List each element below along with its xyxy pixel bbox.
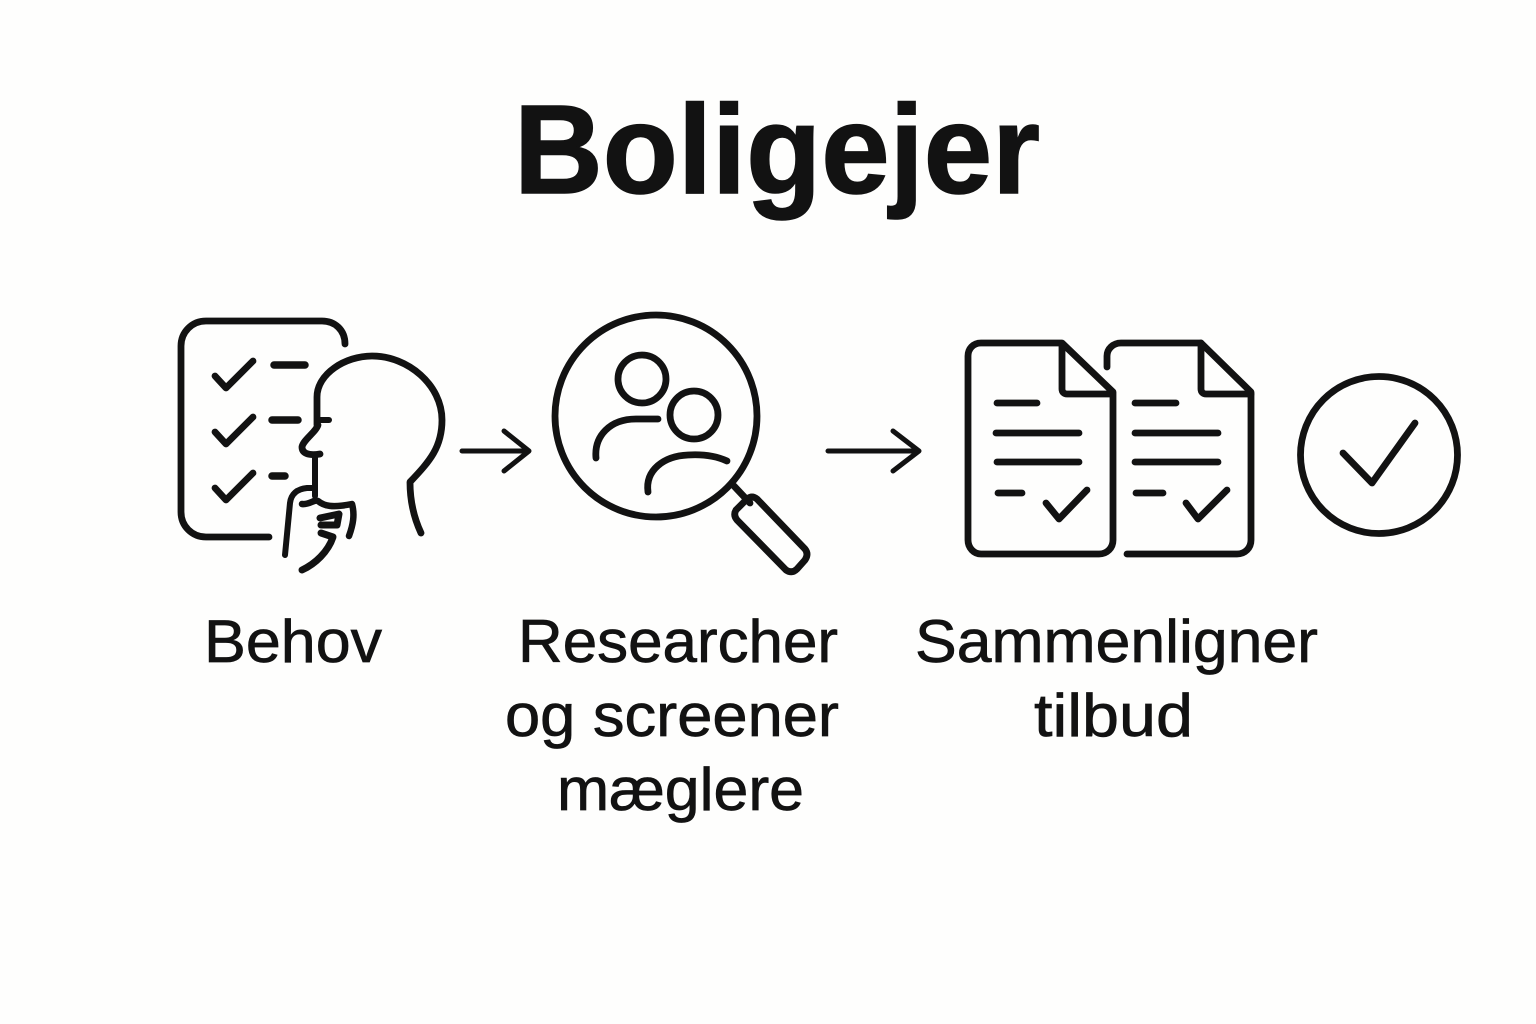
label: sammenligner tilbud [915, 608, 1318, 749]
icon: first document [968, 343, 1113, 554]
icon: check circle [1300, 376, 1458, 534]
arrow: behov to research [462, 431, 529, 471]
label: researcher og screener maeglere [505, 608, 839, 823]
label: researcher og screener maeglere: mæglere [557, 756, 804, 823]
label: behov: Behov [204, 608, 382, 675]
title: Boligejer [514, 79, 1040, 220]
label: sammenligner tilbud: tilbud [1034, 682, 1193, 749]
arrow: research to compare [828, 431, 919, 471]
icon: checklist with thinking person [181, 321, 442, 570]
label: sammenligner tilbud: Sammenligner [915, 608, 1318, 675]
label: researcher og screener maeglere: Researcher [518, 608, 838, 675]
label: researcher og screener maeglere: og screener [505, 682, 839, 749]
icon: magnifying glass with two people [555, 315, 807, 572]
icon: second document [1107, 343, 1251, 554]
